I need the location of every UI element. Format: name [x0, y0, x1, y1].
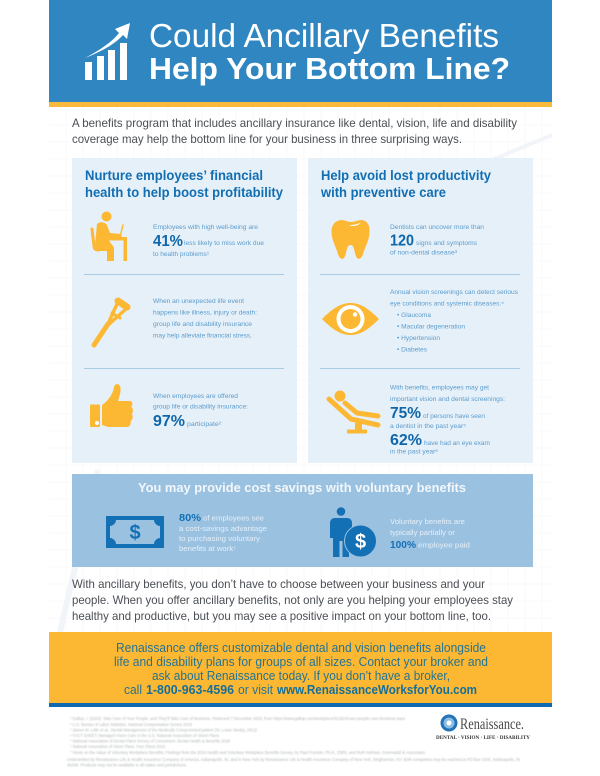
text: screenings stats: in the past year⁶	[390, 448, 438, 456]
call to action text: www.RenaissanceWorksforYou.com	[276, 683, 477, 697]
heading: financial health: Nurture employees’ financial	[85, 167, 263, 183]
logo: Renaissance: Renaissance.	[460, 716, 524, 733]
heading: preventive care: Help avoid lost productivity	[321, 167, 491, 183]
text: vision screenings list: • Diabetes	[397, 346, 428, 354]
text: vision screenings list: Annual vision screenings can detect serious	[390, 289, 519, 296]
text: 120 stat: signs and symptoms	[416, 240, 478, 247]
text: 100% stat: typically partially or	[390, 530, 456, 537]
intro text: A benefits program that includes ancillary insurance like dental, vision, life and disability	[72, 117, 517, 130]
heading: preventive care: with preventive care	[320, 184, 446, 200]
text: 120 stat: of non-dental disease³	[390, 250, 458, 256]
icon: crutch	[94, 301, 127, 345]
footnotes: ² U.S. Bureau of Labor Statistics. National Compensation Survey 2018	[70, 722, 193, 727]
text: unexpected life event: group life and disability insurance	[153, 321, 252, 328]
icon: rising bar chart with arrow	[85, 23, 130, 80]
icon: dollar bill: $	[129, 522, 141, 544]
icon: tooth	[331, 220, 370, 259]
footnotes: ⁵ National Association of Dental Plans Survey of Consumers: Dental Health & Benefits 2018	[70, 738, 231, 744]
footnotes: ⁷ Views on the Value of Voluntary Workplace Benefits: Findings from the 2016 Health and Voluntary Workplace Benefits Survey, by Paul Fronstin, Ph.D., EBRI, and Ruth Helman, Greenwald & Associates	[70, 750, 425, 755]
text: 120 stat	[390, 224, 484, 256]
logo: Renaissance: DENTAL · VISION · LIFE · DISABILITY	[436, 736, 530, 741]
footnotes: ⁴ FACT SHEET: Managed Vision Care in the U.S. National Association of Vision Plans	[70, 733, 219, 738]
intro text	[72, 117, 517, 146]
intro text: coverage may help the bottom line for your business in three surprising ways.	[72, 133, 462, 146]
text: 80% stat: of employees see	[203, 516, 264, 522]
text: 100% stat: Voluntary benefits are	[390, 519, 465, 526]
text: screenings stats: have had an eye exam	[424, 440, 490, 447]
text: 80% stat: benefits at work⁷	[179, 546, 237, 553]
icon: eye	[322, 303, 379, 335]
panel: preventive care	[308, 158, 533, 463]
text: vision screenings list	[390, 289, 519, 354]
text: screenings stats: important vision and dental screenings:	[390, 396, 505, 403]
closing paragraph: people. When you offer ancillary benefits, not only are you helping your employees stay	[72, 594, 513, 607]
call to action text: life and disability plans for groups of all sizes. Contact your broker and	[114, 655, 488, 669]
footnotes	[67, 716, 520, 768]
text: 80% stat: 80%	[179, 512, 202, 524]
text: screenings stats: 75%	[390, 405, 421, 422]
icon: logo sunburst	[440, 714, 458, 732]
text: 100% stat	[390, 519, 470, 551]
text: 41% stat: to health problems¹	[153, 251, 210, 258]
heading: financial health	[85, 167, 283, 200]
heading: voluntary benefits: You may provide cost savings with voluntary benefits	[138, 480, 466, 495]
text: vision screenings list: • Glaucoma	[397, 312, 431, 319]
text: vision screenings list: • Hypertension	[397, 335, 440, 342]
text: 41% stat: 41%	[153, 233, 183, 250]
closing paragraph: healthy and productive, but you may see a positive impact on your bottom line, too.	[72, 610, 491, 623]
text: 80% stat: to purchasing voluntary	[179, 536, 261, 543]
text: screenings stats: of persons have seen	[423, 413, 485, 420]
icon: thumbs up	[90, 384, 133, 427]
text: unexpected life event: happens like illness, injury or death:	[153, 310, 257, 316]
text: 97% stat	[153, 393, 248, 430]
footnotes: ⁶ National Association of Vision Plans. Fact Sheet 2018	[70, 744, 166, 749]
footnotes: 46206. Products may not be available in all states and jurisdictions.	[67, 762, 187, 768]
text: vision screenings list: • Macular degeneration	[397, 324, 465, 330]
call to action text	[114, 641, 488, 697]
text: screenings stats: 62%	[390, 432, 422, 449]
call to action text: or visit	[238, 683, 273, 697]
logo: Renaissance	[436, 714, 530, 741]
icon: person with coin: $	[355, 531, 366, 553]
text: 97% stat: 97%	[153, 413, 185, 430]
icon: dental chair	[329, 390, 378, 434]
heading: financial health: health to help boost profitability	[85, 184, 283, 200]
text: 120 stat: 120	[390, 232, 414, 250]
text: 97% stat: participate²	[187, 421, 222, 428]
text: 80% stat	[179, 512, 267, 553]
footnotes: Underwritten by Renaissance Life & Health Insurance Company of America, Indianapolis, IN, and in New York by Renaissance Life & Health Insurance Company of New York, Binghamton, NY. Both companies may be reached at PO Box 1030, Indianapolis, IN	[67, 757, 520, 762]
title	[149, 17, 510, 86]
header banner	[49, 0, 552, 107]
title: Could Ancillary Benefits	[149, 17, 499, 54]
text: 41% stat	[153, 224, 264, 258]
icon: dollar bill	[106, 516, 164, 548]
text: 41% stat: Employees with high well-being are	[153, 224, 258, 231]
call to action text: 1-800-963-4596	[146, 683, 234, 697]
icon: person with coin	[330, 507, 376, 557]
text: unexpected life event: may help alleviate financial stress.	[153, 332, 252, 340]
text: 80% stat: a cost-savings advantage	[179, 526, 267, 533]
text: 41% stat: less likely to miss work due	[184, 240, 264, 247]
icon: person at laptop	[92, 212, 127, 261]
text: 97% stat: group life or disability insurance:	[153, 404, 248, 410]
panel: financial health	[72, 158, 297, 463]
text: unexpected life event: When an unexpected life event	[153, 298, 244, 305]
closing paragraph: With ancillary benefits, you don’t have to choose between your business and your	[72, 578, 485, 591]
text: 97% stat: When employees are offered	[153, 393, 238, 400]
footnotes: ³ James W. Little et al., Dental Management of the Medically Compromised patient (St. Louis: Mosby, 2012)	[70, 728, 258, 732]
panel: voluntary benefits	[72, 474, 533, 567]
call to action text: Renaissance offers customizable dental and vision benefits alongside	[116, 641, 486, 655]
text: unexpected life event	[153, 298, 257, 340]
footnotes: ¹ Gallup, I. (2020). Take Care of Your People, and They'll Take Care of Business. Retrieved 7 December 2020, from https://www.gallup.com/workplace/312824/care-people-care-business.aspx	[70, 716, 405, 721]
closing paragraph	[72, 578, 513, 623]
title: Help Your Bottom Line?	[149, 51, 510, 86]
text: 100% stat: employee paid	[418, 542, 470, 550]
text: 100% stat: 100%	[390, 539, 417, 551]
call to action text: call	[124, 683, 142, 697]
text: screenings stats: With benefits, employees may get	[390, 384, 489, 392]
call to action text: ask about Renaissance today. If you don’t have a broker,	[152, 669, 450, 683]
text: vision screenings list: eye conditions and systemic diseases:⁴	[390, 300, 504, 308]
text: 120 stat: Dentists can uncover more than	[390, 224, 484, 231]
call to action band	[49, 632, 552, 707]
text: screenings stats: a dentist in the past year⁵	[390, 423, 466, 430]
text: screenings stats	[390, 384, 505, 456]
heading: preventive care	[320, 167, 491, 200]
